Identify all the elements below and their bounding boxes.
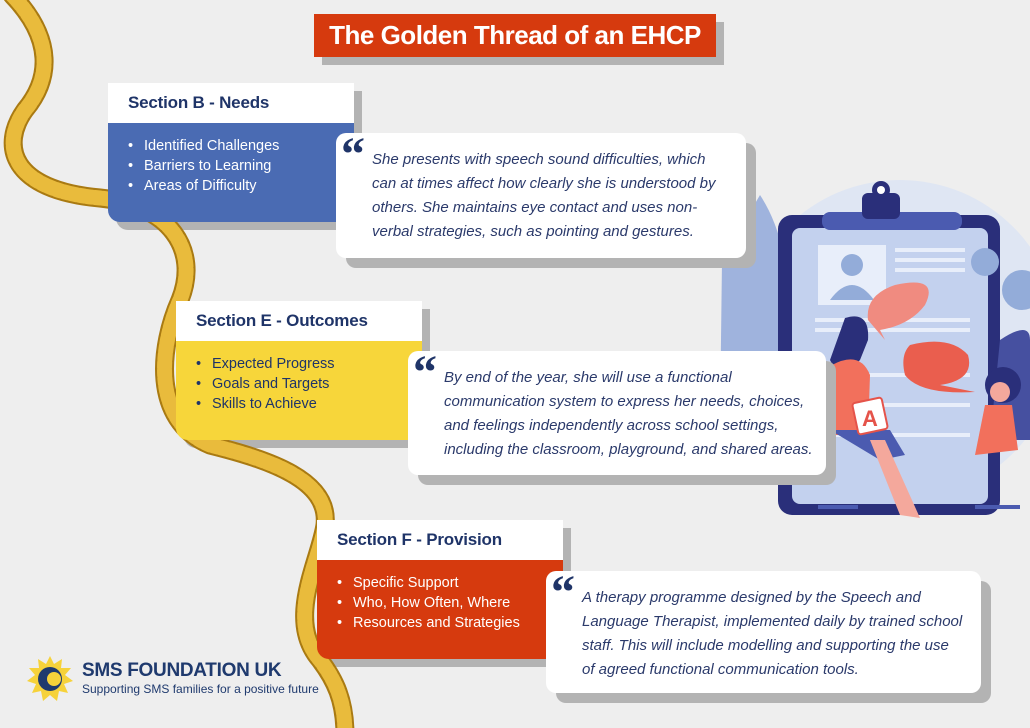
quote F — [546, 571, 981, 693]
panel: section E — [176, 301, 430, 448]
heading E — [176, 301, 422, 341]
quote B — [336, 133, 746, 258]
illustration: clipboard and people — [720, 180, 1030, 518]
icon: sun — [27, 656, 73, 701]
quote E: including the classroom, playground, and shared areas. — [444, 441, 813, 458]
list F: Resources and Strategies — [353, 615, 520, 631]
heading B — [108, 83, 354, 123]
quote B: verbal strategies, such as pointing and gestures. — [372, 223, 694, 240]
list E — [176, 341, 422, 440]
quote E: and feelings independently across school settings, — [444, 417, 778, 434]
heading B: Section B - Needs — [128, 93, 269, 112]
quote B: can at times affect how clearly she is understood by — [372, 175, 716, 192]
logo — [27, 656, 319, 701]
quote E: “ — [413, 346, 437, 399]
list B: Identified Challenges — [144, 138, 279, 154]
quote E: communication system to express her needs, choices, — [444, 393, 804, 410]
list E: Goals and Targets — [212, 376, 329, 392]
illustration: clipboard and people: A — [862, 406, 878, 431]
list E: Skills to Achieve — [212, 396, 317, 412]
heading E: Section E - Outcomes — [196, 311, 368, 330]
list B: Areas of Difficulty — [144, 178, 257, 194]
list E: Expected Progress — [212, 356, 335, 372]
quote E — [408, 351, 826, 475]
quote B: She presents with speech sound difficulties, which — [372, 151, 706, 168]
quote F: “ — [551, 566, 575, 619]
logo: Supporting SMS families for a positive future — [82, 682, 319, 696]
list B — [108, 123, 354, 222]
title — [314, 14, 716, 57]
panel: section F — [317, 520, 571, 667]
list F: Specific Support — [353, 575, 459, 591]
quote F: Language Therapist, implemented daily by trained school — [582, 613, 962, 630]
title: The Golden Thread of an EHCP — [329, 20, 701, 50]
quote B: “ — [341, 128, 365, 181]
list F — [317, 560, 563, 659]
quote F: staff. This will include modelling and supporting the use — [582, 637, 949, 654]
heading F — [317, 520, 563, 560]
list B: Barriers to Learning — [144, 158, 271, 174]
quote F: A therapy programme designed by the Speech and — [582, 589, 921, 606]
quote E: By end of the year, she will use a functional — [444, 369, 732, 386]
quote F: of agreed functional communication tools. — [582, 661, 859, 678]
list F: Who, How Often, Where — [353, 595, 510, 611]
heading F: Section F - Provision — [337, 530, 502, 549]
panel: section B — [108, 83, 362, 230]
logo: SMS FOUNDATION UK — [82, 660, 281, 681]
quote B: others. She maintains eye contact and uses non- — [372, 199, 697, 216]
